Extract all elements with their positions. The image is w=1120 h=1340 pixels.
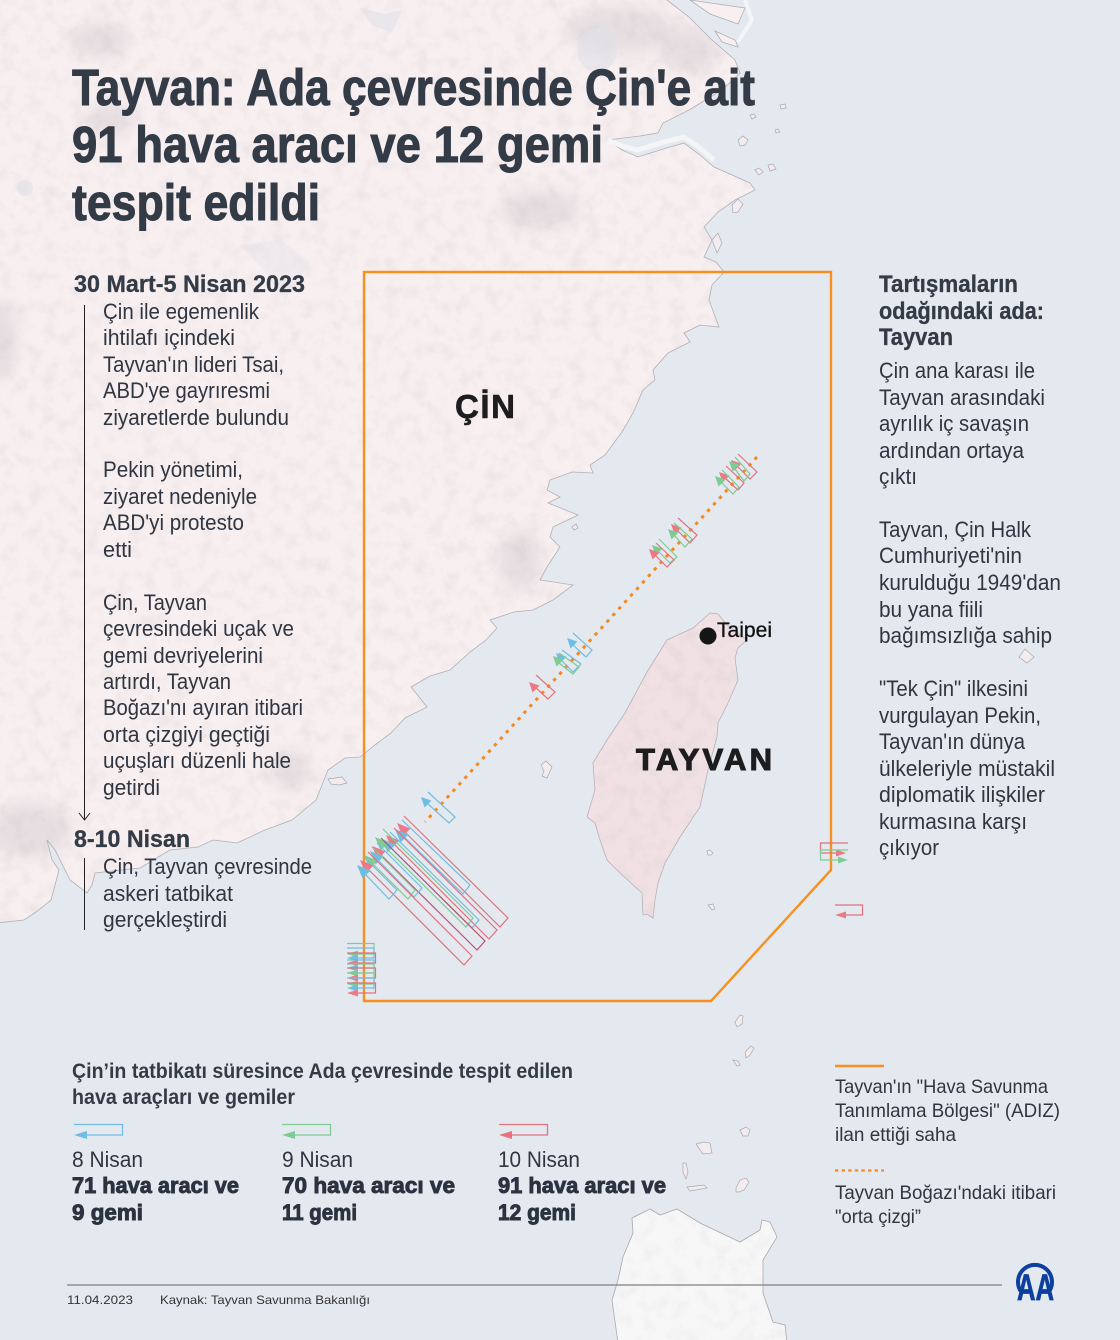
title: 91 hava aracı ve 12 gemi	[72, 116, 603, 173]
right column body text: ülkeleriyle müstakil	[879, 756, 1055, 781]
right column heading	[879, 271, 1044, 351]
legend: median line: Tayvan Boğazı'ndaki itibari	[835, 1182, 1056, 1204]
icon: AA logo	[1017, 1265, 1054, 1308]
map label: Taiwan: TAYVAN	[636, 742, 772, 777]
summary: 10 April	[498, 1124, 666, 1225]
legend: ADIZ: Tayvan'ın "Hava Savunma	[835, 1076, 1048, 1098]
timeline panel	[74, 271, 312, 932]
footer date: 11.04.2023	[67, 1293, 133, 1307]
summary heading: hava araçları ve gemiler	[72, 1086, 295, 1109]
title	[72, 59, 755, 231]
right column body text: ardından ortaya	[879, 438, 1025, 463]
right column heading: odağındaki ada:	[879, 298, 1044, 325]
footer source: Kaynak: Tayvan Savunma Bakanlığı	[160, 1293, 370, 1307]
timeline text: second period	[103, 854, 312, 932]
summary: 9 April: 70 hava aracı ve	[282, 1173, 455, 1198]
summary heading	[72, 1060, 573, 1109]
right column body text: Tayvan, Çin Halk	[879, 517, 1032, 542]
right column body text: bağımsızlığa sahip	[879, 623, 1052, 648]
right column body text: çıkıyor	[879, 835, 939, 860]
icon: AA logo: AA	[1017, 1267, 1054, 1308]
timeline date: 30 March-5 April: 30 Mart-5 Nisan 2023	[74, 271, 305, 298]
right column body text	[879, 358, 1061, 860]
summary: 9 April: 11 gemi	[282, 1200, 357, 1225]
map: Taiwan	[586, 612, 748, 919]
summary: 10 April: 10 Nisan	[498, 1147, 580, 1172]
timeline text: first period: ziyaret nedeniyle	[103, 484, 257, 509]
timeline text: first period: Tayvan'ın lideri Tsai,	[103, 352, 284, 377]
timeline text: first period: Pekin yönetimi,	[103, 457, 243, 482]
summary: 9 April: 9 Nisan	[282, 1147, 353, 1172]
timeline text: first period: Boğazı'nı ayıran itibari	[103, 695, 303, 720]
timeline text: first period: ihtilafı içindeki	[103, 325, 235, 350]
right column heading: Tartışmaların	[879, 271, 1018, 298]
legend: median line: "orta çizgi”	[835, 1206, 921, 1228]
summary: 10 April: 91 hava aracı ve	[498, 1173, 666, 1198]
right column panel	[879, 271, 1061, 860]
map marker: Taipei	[700, 619, 772, 644]
legend: ADIZ	[835, 1066, 1060, 1146]
title: tespit edildi	[72, 174, 320, 231]
right column body text: bu yana fiili	[879, 597, 983, 622]
legend: ADIZ: ilan ettiği saha	[835, 1124, 956, 1146]
summary: 8 April	[72, 1124, 239, 1225]
timeline text: first period	[103, 299, 303, 800]
timeline text: first period: orta çizgiyi geçtiği	[103, 722, 270, 747]
median line of the strait	[425, 457, 757, 822]
summary heading: Çin’in tatbikatı süresince Ada çevresinde tespit edilen	[72, 1060, 573, 1083]
legend: ADIZ: Tanımlama Bölgesi" (ADIZ)	[835, 1100, 1060, 1122]
timeline text: first period: Çin, Tayvan	[103, 590, 207, 615]
summary: 9 April	[282, 1124, 455, 1225]
right column body text: vurgulayan Pekin,	[879, 703, 1041, 728]
timeline text: first period: gemi devriyelerini	[103, 643, 263, 668]
timeline date: 8-10 April: 8-10 Nisan	[74, 826, 190, 853]
summary: 8 April: 8 Nisan	[72, 1147, 143, 1172]
timeline text: first period: artırdı, Tayvan	[103, 669, 231, 694]
timeline text: first period: çevresindeki uçak ve	[103, 616, 294, 641]
right column body text: diplomatik ilişkiler	[879, 782, 1045, 807]
aircraft tracks: east side	[820, 843, 862, 918]
timeline text: first period: ABD'ye gayrıresmi	[103, 378, 270, 403]
timeline text: first period: Çin ile egemenlik	[103, 299, 260, 324]
ADIZ boundary	[364, 272, 831, 1001]
legend: median line	[835, 1170, 1056, 1228]
aircraft tracks: left horizontal stack	[347, 944, 376, 996]
timeline text: first period: uçuşları düzenli hale	[103, 748, 291, 773]
right column body text: Çin ana karası ile	[879, 358, 1035, 383]
map: mainland China	[0, 0, 800, 940]
title: Tayvan: Ada çevresinde Çin'e ait	[72, 59, 755, 116]
timeline text: second period: gerçekleştirdi	[103, 907, 227, 932]
map label: China: ÇİN	[455, 388, 515, 425]
right column body text: çıktı	[879, 464, 917, 489]
timeline text: first period: ABD'yi protesto	[103, 510, 244, 535]
map: coastal islands	[328, 104, 1034, 1192]
right column body text: Tayvan'ın dünya	[879, 729, 1026, 754]
timeline text: first period: etti	[103, 537, 132, 562]
aircraft tracks: south-west group	[357, 816, 508, 965]
timeline text: second period: Çin, Tayvan çevresinde	[103, 854, 312, 879]
right column body text: ayrılık iç savaşın	[879, 411, 1029, 436]
right column heading: Tayvan	[879, 324, 953, 351]
summary: 8 April: 71 hava aracı ve	[72, 1173, 239, 1198]
timeline text: first period: ziyaretlerde bulundu	[103, 405, 289, 430]
right column body text: kurulduğu 1949'dan	[879, 570, 1061, 595]
right column body text: Tayvan arasındaki	[879, 385, 1045, 410]
legend arrow: green	[282, 1124, 330, 1139]
aircraft tracks: median line groups	[421, 454, 757, 823]
summary: 10 April: 12 gemi	[498, 1200, 576, 1225]
map marker: Taipei: Taipei	[717, 619, 772, 642]
map: Luzon	[610, 1205, 790, 1340]
right column body text: Cumhuriyeti'nin	[879, 543, 1022, 568]
right column body text: kurmasına karşı	[879, 809, 1027, 834]
timeline line with arrow	[79, 305, 90, 930]
legend arrow: red	[499, 1124, 548, 1139]
timeline text: second period: askeri tatbikat	[103, 881, 233, 906]
summary: 8 April: 9 gemi	[72, 1200, 143, 1225]
right column body text: "Tek Çin" ilkesini	[879, 676, 1028, 701]
timeline text: first period: getirdi	[103, 775, 160, 800]
legend arrow: blue	[74, 1124, 122, 1139]
